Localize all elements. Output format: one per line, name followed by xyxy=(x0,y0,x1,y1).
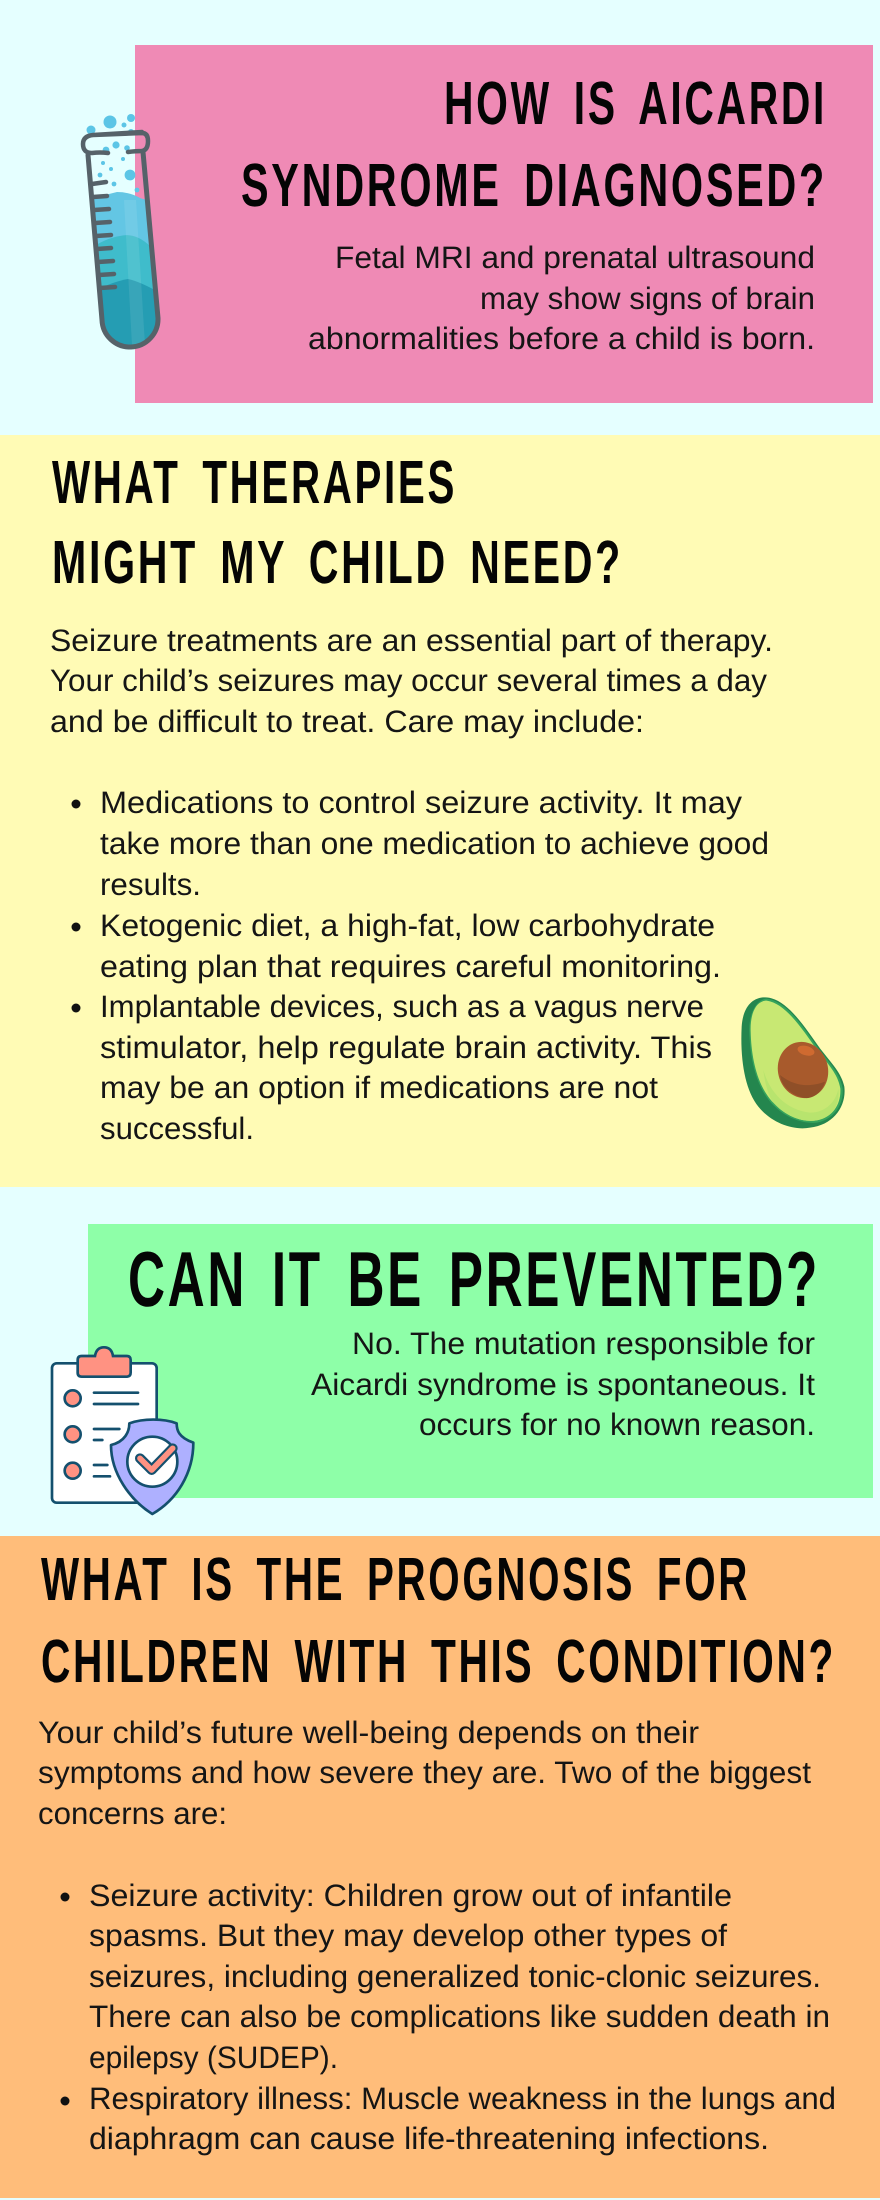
heading: what therapies might my child need: MIGHT MY CHILD NEED? xyxy=(52,528,623,596)
heading: what is the prognosis xyxy=(41,1545,836,1695)
text block: therapies intro: Seizure treatments are an essential part of therapy. xyxy=(50,623,773,658)
text block: diagnosis description xyxy=(308,240,815,356)
list: prognosis concerns: spasms. But they may develop other types of xyxy=(89,1918,727,1953)
text block: therapies intro: Your child’s seizures may occur several times a day xyxy=(50,663,767,698)
panel: therapies xyxy=(0,435,880,1187)
list: prognosis concerns: diaphragm can cause life-threatening infections. xyxy=(89,2121,769,2156)
text block: diagnosis description: Fetal MRI and prenatal ultrasound xyxy=(335,240,815,275)
panel: can it be prevented xyxy=(88,1224,873,1498)
text block: prevention answer xyxy=(311,1326,815,1442)
text block: prognosis intro: concerns are: xyxy=(38,1796,227,1831)
icon: test tube xyxy=(83,114,165,360)
text block: prevention answer: Aicardi syndrome is spontaneous. It xyxy=(311,1367,815,1402)
list: therapy options xyxy=(72,785,769,1146)
panel: how is it diagnosed xyxy=(135,45,873,403)
text block: prognosis intro: Your child’s future well-being depends on their xyxy=(38,1715,699,1750)
text block: prevention answer: occurs for no known reason. xyxy=(419,1407,815,1442)
list: prognosis concerns: seizures, including generalized tonic-clonic seizures. xyxy=(89,1959,821,1994)
list: prognosis concerns: Respiratory illness: Muscle weakness in the lungs and xyxy=(89,2081,836,2116)
list: prognosis concerns: Seizure activity: Children grow out of infantile xyxy=(89,1878,732,1913)
panel: prognosis xyxy=(0,1536,880,2198)
list: therapy options: eating plan that requires careful monitoring. xyxy=(100,949,721,984)
icon: avocado xyxy=(741,997,845,1128)
text block: prevention answer: No. The mutation responsible for xyxy=(352,1326,815,1361)
heading: how is Aicardi syndrome diagnosed xyxy=(241,69,827,219)
list: prognosis concerns xyxy=(60,1878,836,2156)
list: therapy options: Ketogenic diet, a high-fat, low carbohydrate xyxy=(100,908,715,943)
list: therapy options: may be an option if medications are not xyxy=(100,1070,658,1105)
list: therapy options: take more than one medication to achieve good xyxy=(100,826,769,861)
text block: prognosis intro xyxy=(38,1715,811,1831)
text block: prognosis intro: symptoms and how severe they are. Two of the biggest xyxy=(38,1755,811,1790)
icon: clipboard with shield xyxy=(52,1347,193,1514)
heading: what therapies might my child need xyxy=(52,448,623,596)
list: therapy options: Medications to control seizure activity. It may xyxy=(100,785,743,820)
text block: diagnosis description: may show signs of brain xyxy=(480,281,815,316)
list: therapy options: stimulator, help regulate brain activity. This xyxy=(100,1030,712,1065)
list: therapy options: Implantable devices, such as a vagus nerve xyxy=(100,989,704,1024)
text block: diagnosis description: abnormalities before a child is born. xyxy=(308,321,815,356)
text block: therapies intro xyxy=(50,623,773,739)
text block: therapies intro: and be difficult to treat. Care may include: xyxy=(50,704,644,739)
list: prognosis concerns: There can also be complications like sudden death in xyxy=(89,1999,830,2034)
list: therapy options: successful. xyxy=(100,1111,254,1146)
list: therapy options: results. xyxy=(100,867,201,902)
heading: what therapies might my child need: WHAT THERAPIES xyxy=(52,448,457,516)
list: prognosis concerns: epilepsy (SUDEP). xyxy=(89,2040,338,2075)
